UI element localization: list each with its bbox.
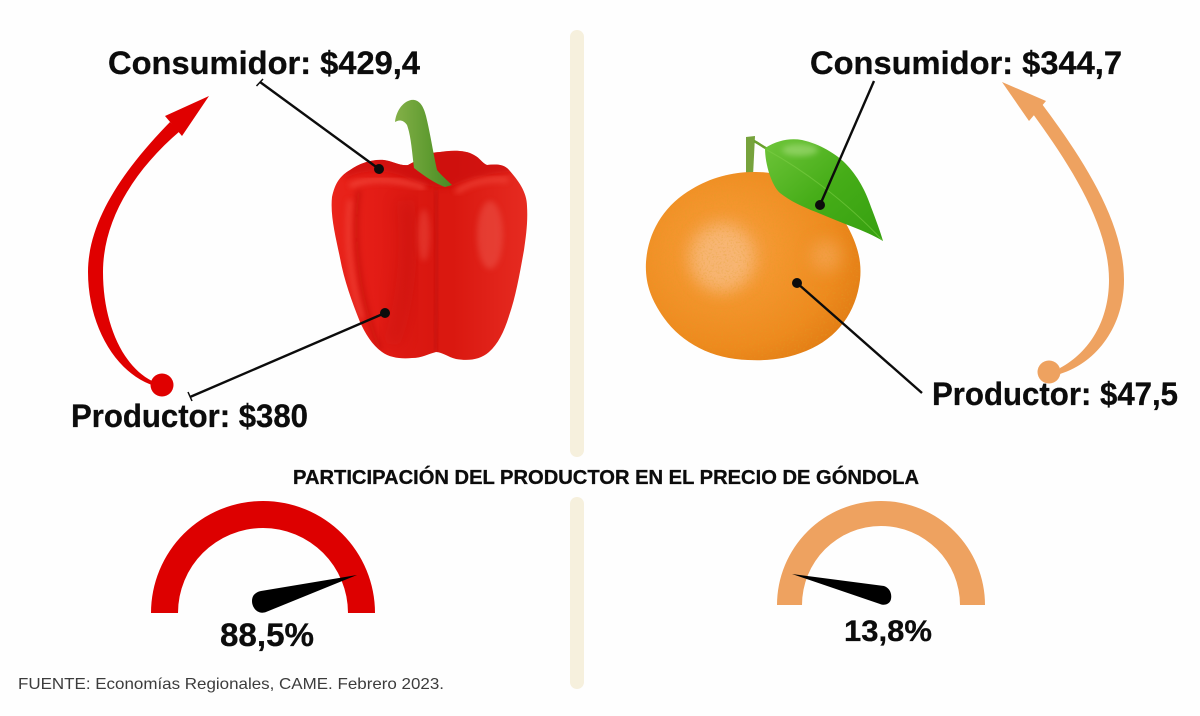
orange stem [746, 136, 755, 176]
gauge needle: pepper [252, 575, 357, 613]
arrow: orange producer to consumer [1002, 82, 1124, 384]
label: orange producer price: Productor: $47,5 [932, 376, 1178, 412]
leader line: orange producer price [792, 278, 922, 393]
icon: orange with leaf [640, 136, 883, 365]
gauge: pepper [151, 501, 375, 613]
icon: red bell pepper [332, 100, 527, 360]
divider: bottom [570, 497, 584, 689]
label: orange consumer price: Consumidor: $344,7 [810, 45, 1122, 81]
pepper stem [395, 100, 452, 187]
arrow: red producer to consumer [88, 96, 209, 396]
gauge value: orange: 13,8% [844, 615, 932, 648]
heading: PARTICIPACIÓN DEL PRODUCTOR EN EL PRECIO DE GÓNDOLA [293, 465, 919, 489]
source note: FUENTE: Economías Regionales, CAME. Febrero 2023. [18, 676, 444, 693]
leader line: orange consumer price [815, 81, 874, 210]
divider: top [570, 30, 584, 457]
gauge needle: orange [792, 574, 891, 605]
label: pepper producer price: Productor: $380 [71, 398, 308, 434]
label: pepper consumer price: Consumidor: $429,4 [108, 45, 420, 81]
leader line: pepper consumer price [256, 79, 384, 174]
gauge value: pepper: 88,5% [220, 617, 314, 653]
leader line: pepper producer price [188, 308, 390, 401]
gauge: orange [777, 501, 985, 605]
leaf [765, 139, 883, 241]
